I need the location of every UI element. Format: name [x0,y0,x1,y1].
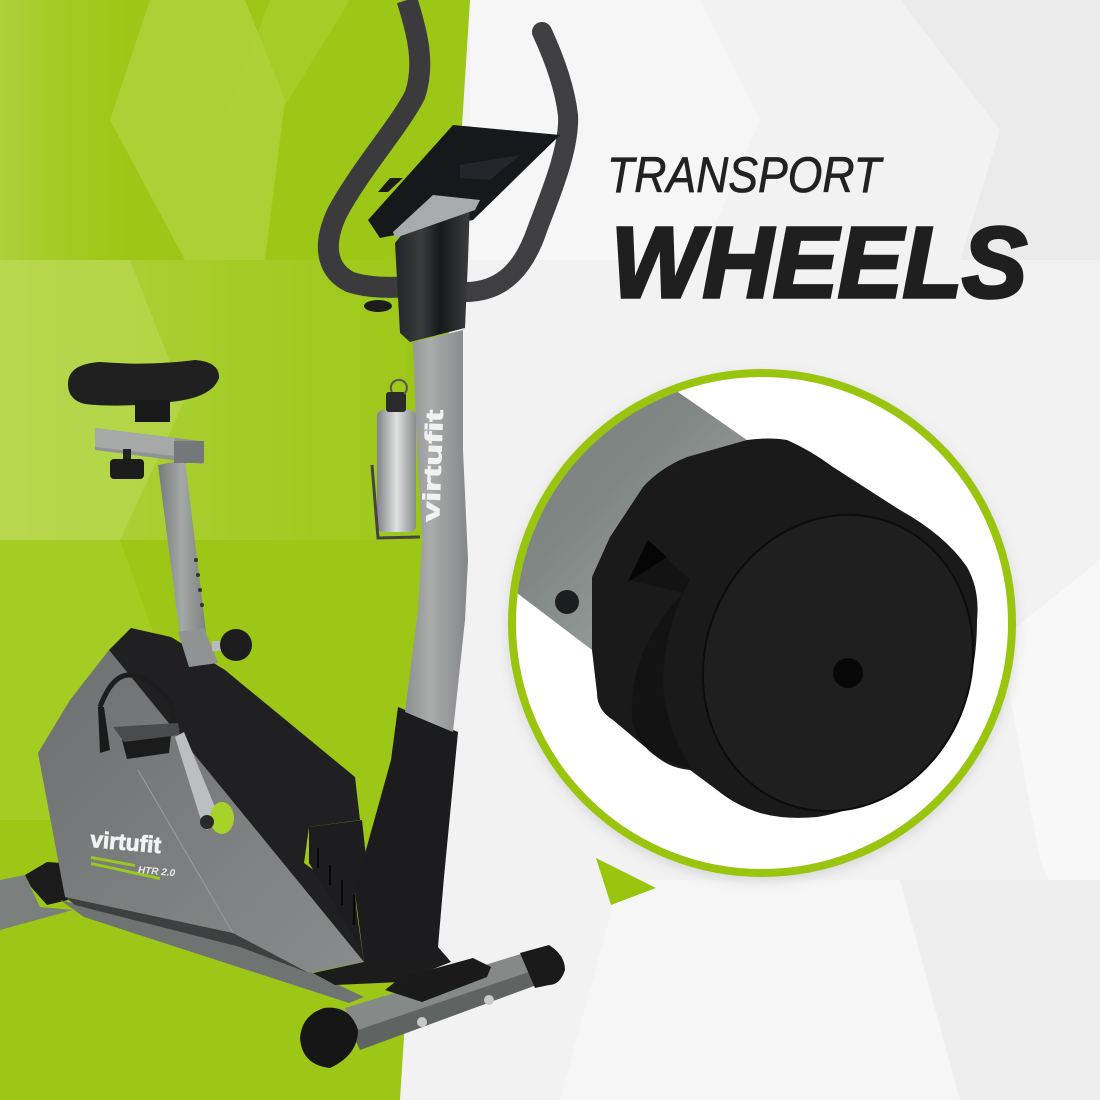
crank and pedal [98,675,234,834]
tube screw [555,590,579,614]
flywheel cover [38,628,366,973]
heading: wheels: WHEELS [611,207,1027,319]
green panel [0,0,470,1100]
small clamp [378,178,403,192]
console bracket [393,195,480,238]
bottle [372,380,420,538]
logo: virtufit: virtufit [89,826,163,858]
seat post [158,460,252,667]
handlebar right [465,32,568,292]
main column lower shroud [355,707,458,962]
top shroud [395,197,470,342]
wheel body [592,438,978,818]
title [607,147,1027,319]
adjustment knob [364,300,392,312]
grey tube [518,392,747,650]
saddle [68,360,219,422]
main column [405,330,468,732]
logo stripes [91,856,160,880]
model label: HTR 2.0 [137,865,176,879]
base bracket [313,947,451,985]
rear stabiliser [0,862,364,1003]
circular wheel detail [480,370,1016,881]
wheel gap [628,540,667,582]
column logo: virtufit [418,409,449,522]
wheel screw [833,658,863,688]
handlebar left [328,0,420,287]
seat bracket [95,428,204,479]
heading: transport: TRANSPORT [607,147,884,203]
wheel groove [632,558,689,766]
console plate [368,125,560,238]
bike [0,0,568,1068]
wheel face [702,514,974,812]
arrow: green triangle [596,858,656,905]
front stabiliser [300,945,565,1068]
